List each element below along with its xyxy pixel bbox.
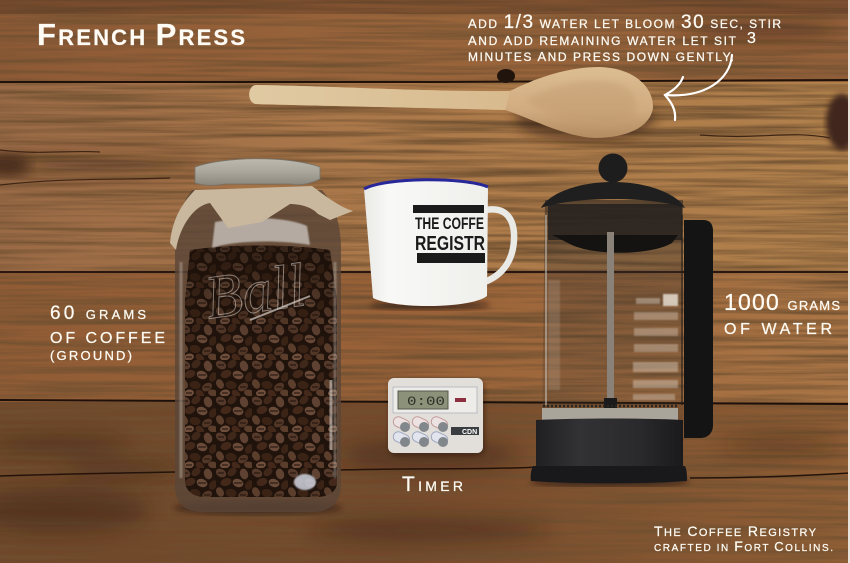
plunger top [548,204,682,253]
timer buttons [392,415,449,447]
mug logo [413,205,485,263]
enamel mug [364,180,514,310]
coffee amount label: OF COFFEE [50,330,165,347]
jar cloth [170,186,353,250]
plunger rod [607,232,614,405]
mug handle [486,209,514,281]
timer label: TIMER [402,473,463,496]
title: FRENCH PRESS [37,17,245,52]
plunger filter [542,406,678,420]
instructions text: AND ADD REMAINING WATER LET SIT [468,33,737,48]
instructions text: MINUTES AND PRESS DOWN GENTLY. [468,49,734,64]
arrow to spoon [665,55,732,120]
water amount label [724,289,840,338]
press base [531,418,687,483]
instructions text: ADD 1/3 WATER LET BLOOM 30 SEC, STIR [468,12,781,33]
water amount label: 1000 GRAMS [724,289,840,315]
press knob [598,154,628,182]
instructions text: 3 [747,30,756,47]
jar logo: Ball [201,251,310,333]
footer credit: THE COFFEE REGISTRY [654,523,817,539]
press handle [684,220,713,438]
coffee amount label: (GROUND) [50,348,132,363]
timer [388,378,484,455]
footer credit: CRAFTED IN FORT COLLINS. [654,538,833,554]
glass printing [633,294,678,400]
mug logo: REGISTR [415,233,485,255]
timer display: 0:00 [407,394,445,409]
spoon [249,67,655,142]
mug logo: THE COFFE [415,214,484,233]
glass beaker [542,200,683,420]
footer credit [654,523,833,554]
coffee beans [185,246,337,497]
timer brand: CDN [462,429,477,436]
coffee amount label: 60 GRAMS [50,303,146,324]
water amount label: OF WATER [724,321,832,338]
coffee amount label [50,303,165,363]
instructions text [468,12,781,64]
jar of coffee beans [170,159,353,515]
press lid [541,182,685,208]
jar lid [195,159,320,185]
french press [530,154,713,486]
